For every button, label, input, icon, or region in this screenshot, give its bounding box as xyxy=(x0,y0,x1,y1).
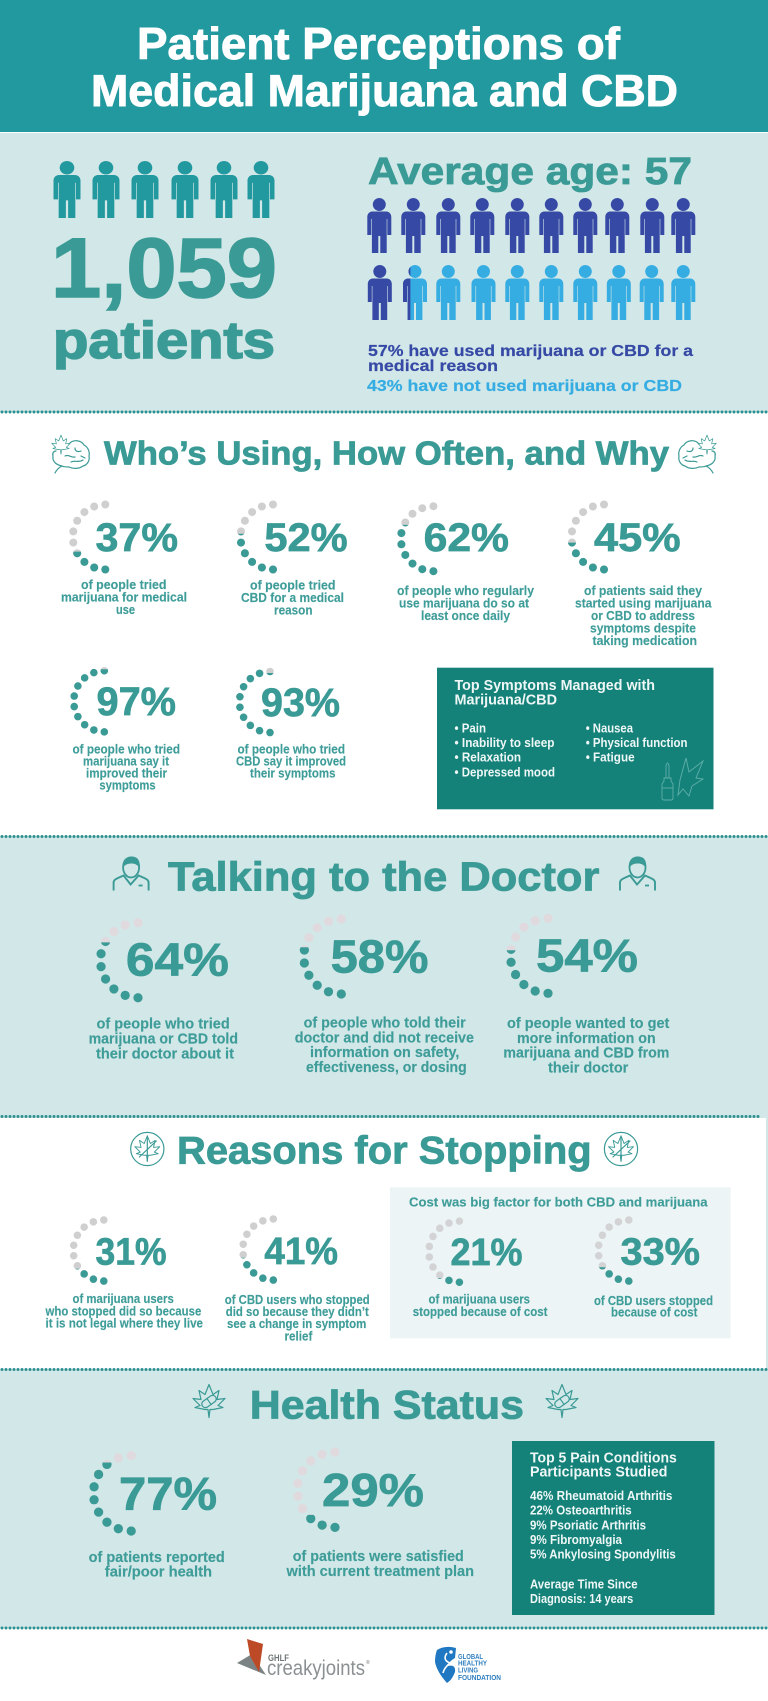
symptom list right xyxy=(586,720,688,765)
legend: used xyxy=(368,343,693,375)
icon: circled leaf left xyxy=(131,1132,164,1166)
stat: 52% xyxy=(237,500,348,618)
caption: stopped because of cost xyxy=(413,1304,548,1319)
icon: leaf with pill left xyxy=(193,1384,225,1418)
caption: it is not legal where they live xyxy=(46,1315,203,1330)
logo: creakyjoints: ® xyxy=(366,1659,370,1666)
legend: used: 57% have used marijuana or CBD for a xyxy=(368,343,693,360)
ring xyxy=(300,914,346,999)
label: patients: patients xyxy=(53,312,275,370)
panel: who's using xyxy=(52,434,716,809)
stat: 58% xyxy=(295,914,474,1076)
condition list xyxy=(530,1488,676,1562)
caption: marijuana or CBD told xyxy=(89,1031,238,1048)
box heading xyxy=(530,1450,677,1481)
caption: symptoms despite xyxy=(590,620,696,636)
caption xyxy=(241,578,344,618)
panel: cost callout xyxy=(390,1187,731,1338)
symptom list left: • Depressed mood xyxy=(454,764,555,779)
logo: creakyjoints: creakyjoints xyxy=(267,1657,365,1680)
caption: use xyxy=(116,602,135,617)
caption: their symptoms xyxy=(250,765,336,780)
caption: taking medication xyxy=(592,633,697,648)
caption: CBD for a medical xyxy=(241,590,344,605)
box heading: Marijuana/CBD xyxy=(454,693,557,709)
value: 21% xyxy=(450,1232,522,1274)
caption xyxy=(575,583,712,648)
caption: of people who tried xyxy=(72,742,180,757)
header band xyxy=(0,0,768,132)
symptom list left xyxy=(454,720,555,779)
caption xyxy=(89,1016,238,1062)
value: 58% xyxy=(331,931,428,983)
logo: global healthy living foundation: FOUNDATION xyxy=(458,1675,501,1682)
icon: brain with leaf right xyxy=(679,435,716,473)
caption xyxy=(397,583,535,623)
stat: 33% xyxy=(594,1216,713,1320)
ring xyxy=(239,1215,277,1284)
caption xyxy=(286,1548,474,1580)
caption xyxy=(503,1015,669,1076)
ring xyxy=(426,1217,463,1286)
stat: 45% xyxy=(568,500,712,648)
logo: creakyjoints xyxy=(237,1639,370,1680)
caption: see a change in symptom xyxy=(227,1316,366,1331)
caption: fair/poor health xyxy=(105,1564,212,1580)
caption: started using marijuana xyxy=(575,596,712,611)
caption: of patients said they xyxy=(584,583,703,598)
pictogram: people used vs not used xyxy=(367,198,695,320)
logo: global healthy living foundation: HEALTHY xyxy=(458,1661,487,1668)
value: 93% xyxy=(261,681,340,725)
caption: of people who tried xyxy=(96,1016,230,1033)
value: 41% xyxy=(264,1231,338,1273)
caption: who stopped did so because xyxy=(45,1303,201,1318)
box heading: Top 5 Pain Conditions xyxy=(530,1450,677,1466)
panel: patient count xyxy=(51,161,277,370)
ring xyxy=(70,1216,108,1285)
caption: marijuana say it xyxy=(83,754,170,769)
caption xyxy=(594,1293,713,1320)
caption: with current treatment plan xyxy=(286,1563,474,1580)
ring xyxy=(69,500,109,574)
heading: reasons for stopping: Reasons for Stopping xyxy=(177,1129,592,1172)
panel: top 5 pain conditions xyxy=(512,1441,714,1615)
value: 29% xyxy=(322,1464,424,1516)
stat: 41% xyxy=(225,1215,370,1343)
callout heading: Cost was big factor for both CBD and marijuana xyxy=(409,1195,708,1210)
logo: global healthy living foundation: GLOBAL xyxy=(458,1654,484,1661)
value: 77% xyxy=(119,1467,217,1519)
caption: of people tried xyxy=(81,577,167,592)
panel: reasons for stopping xyxy=(45,1129,731,1343)
caption: their doctor xyxy=(548,1059,628,1076)
caption: marijuana for medical xyxy=(61,590,187,604)
ring xyxy=(236,668,274,736)
caption: information on safety, xyxy=(310,1044,459,1061)
value: 54% xyxy=(536,930,638,982)
icon: brain with leaf left xyxy=(52,435,89,473)
heading: health status: Health Status xyxy=(250,1383,524,1427)
caption xyxy=(225,1292,370,1343)
value: 62% xyxy=(424,516,509,560)
condition list: 46% Rheumatoid Arthritis xyxy=(530,1488,672,1503)
caption: did so because they didn’t xyxy=(226,1304,369,1319)
value: 37% xyxy=(96,516,178,560)
legend: not used: 43% have not used marijuana or CBD xyxy=(367,378,682,395)
symptom list left: • Relaxation xyxy=(454,750,521,765)
caption xyxy=(61,577,187,617)
icon: bottle and leaf xyxy=(662,758,703,800)
box heading: Top Symptoms Managed with xyxy=(454,678,655,694)
stat: 21% xyxy=(413,1217,548,1319)
caption xyxy=(89,1549,225,1580)
stat: 31% xyxy=(45,1216,203,1330)
ring xyxy=(568,500,608,574)
caption: effectiveness, or dosing xyxy=(306,1059,467,1076)
symptom list left: • Inability to sleep xyxy=(454,735,555,750)
logo: creakyjoints: GHLF xyxy=(268,1653,289,1663)
symptom list right: • Physical function xyxy=(586,735,688,750)
value: 97% xyxy=(96,680,176,724)
ring xyxy=(506,914,553,998)
ring xyxy=(237,500,277,574)
condition list: 22% Osteoarthritis xyxy=(530,1503,632,1518)
stat: 37% xyxy=(61,500,187,617)
condition list: 5% Ankylosing Spondylitis xyxy=(530,1547,676,1562)
ring xyxy=(89,1451,136,1536)
symptom list right: • Fatigue xyxy=(586,750,635,765)
ring xyxy=(397,502,437,575)
panel: average age xyxy=(367,151,695,395)
stat: 54% xyxy=(503,914,669,1076)
caption: of people tried xyxy=(250,578,336,592)
panel: talking to the doctor xyxy=(89,853,669,1076)
caption: of marijuana users xyxy=(428,1292,530,1307)
caption: marijuana and CBD from xyxy=(503,1044,669,1061)
caption: of people who told their xyxy=(304,1015,466,1032)
caption: of people who tried xyxy=(238,742,345,757)
stat: 97% xyxy=(70,667,180,793)
stat: 62% xyxy=(397,502,535,623)
value: 33% xyxy=(620,1231,700,1273)
caption: more information on xyxy=(517,1030,656,1047)
average time since diagnosis: Average Time Since xyxy=(530,1576,638,1591)
title: Patient Perceptions of xyxy=(137,20,620,69)
ring xyxy=(96,918,143,1002)
caption xyxy=(413,1292,548,1319)
value: 45% xyxy=(594,516,681,560)
stat: 93% xyxy=(236,668,346,780)
icon: row of six people xyxy=(54,161,274,218)
caption: of CBD users stopped xyxy=(594,1293,713,1308)
caption xyxy=(295,1015,474,1076)
caption: relief xyxy=(284,1328,313,1343)
stat: 77% xyxy=(89,1451,225,1580)
caption: of marijuana users xyxy=(72,1291,174,1306)
average time since diagnosis xyxy=(530,1576,638,1606)
ring xyxy=(70,667,108,736)
title: Medical Marijuana and CBD xyxy=(91,67,678,116)
title xyxy=(91,20,678,116)
box heading: Participants Studied xyxy=(530,1465,668,1481)
logo: global healthy living foundation xyxy=(435,1647,501,1683)
condition list: 9% Psoriatic Arthritis xyxy=(530,1517,646,1532)
section background: health status xyxy=(0,1369,768,1628)
caption: symptoms xyxy=(99,778,156,793)
caption: improved their xyxy=(86,765,167,780)
panel: health status xyxy=(89,1383,715,1615)
box heading xyxy=(454,678,655,709)
average time since diagnosis: Diagnosis: 14 years xyxy=(530,1591,633,1606)
caption: or CBD to address xyxy=(591,608,695,623)
caption: least once daily xyxy=(421,608,511,623)
caption: their doctor about it xyxy=(96,1045,234,1062)
stat: 29% xyxy=(286,1447,474,1580)
section background: reasons edge xyxy=(766,1118,768,1369)
ring xyxy=(595,1216,633,1285)
caption: of CBD users who stopped xyxy=(225,1292,370,1307)
heading: talking to the doctor: Talking to the Doctor xyxy=(168,853,599,899)
caption: of people wanted to get xyxy=(507,1015,669,1032)
icon: circled leaf right xyxy=(604,1132,638,1166)
icon: doctor left xyxy=(114,856,149,890)
number: 1,059: 1,059 xyxy=(51,221,277,315)
caption: because of cost xyxy=(611,1305,698,1320)
symptom list left: • Pain xyxy=(454,720,486,735)
caption: use marijuana do so at xyxy=(399,596,530,611)
icon: leaf with pill right xyxy=(546,1384,578,1418)
legend: used: medical reason xyxy=(368,358,498,375)
condition list: 9% Fibromyalgia xyxy=(530,1532,623,1547)
value: 52% xyxy=(264,516,348,560)
caption: CBD say it improved xyxy=(236,754,346,769)
caption xyxy=(236,742,346,780)
ring xyxy=(293,1447,340,1532)
value: 31% xyxy=(96,1231,166,1273)
caption xyxy=(72,742,180,793)
caption: of patients were satisfied xyxy=(293,1548,464,1565)
caption: doctor and did not receive xyxy=(295,1029,474,1046)
logo: global healthy living foundation: LIVING xyxy=(458,1668,478,1675)
caption: of people who regularly xyxy=(397,583,535,598)
panel: top symptoms xyxy=(437,668,714,809)
caption: reason xyxy=(274,602,313,618)
section background: overview xyxy=(0,133,768,412)
value: 64% xyxy=(126,934,229,986)
caption xyxy=(45,1291,203,1330)
icon: doctor right xyxy=(620,856,655,890)
section background: talking to the doctor xyxy=(0,836,768,1118)
symptom list right: • Nausea xyxy=(586,720,634,735)
heading: average age: Average age: 57 xyxy=(368,151,692,193)
stat: 64% xyxy=(89,918,238,1062)
caption: of patients reported xyxy=(89,1549,225,1566)
heading: who's using: Who’s Using, How Often, and Why xyxy=(104,434,670,472)
